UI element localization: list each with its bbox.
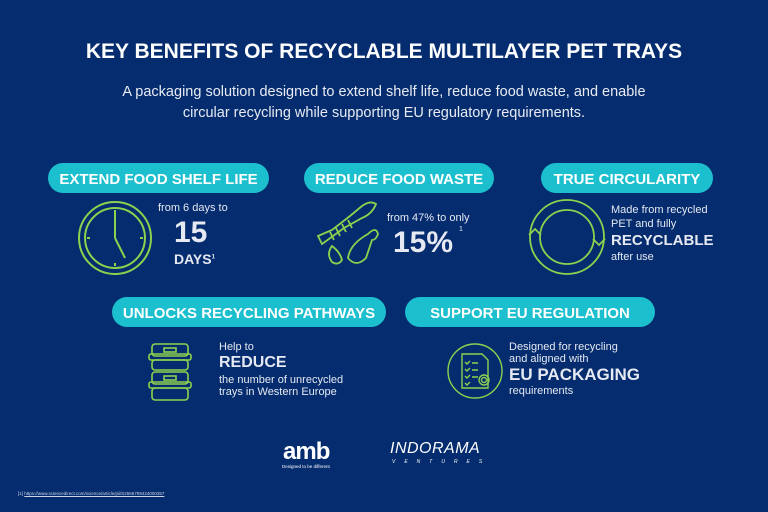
icon: food waste [316,202,379,264]
title: KEY BENEFITS OF RECYCLABLE MULTILAYER PET TRAYS [86,40,682,63]
text: recycling pathways: Help to [219,341,254,353]
pill: extend food shelf life: EXTEND FOOD SHELF LIFE [59,171,258,188]
footnote: [1] https://www.sciencedirect.com/science/article/pii/S2666789424000357 [18,491,164,496]
text: circularity: Made from recycled [611,204,708,216]
text: eu regulation: EU PACKAGING [509,365,640,384]
text: circularity: RECYCLABLE [611,232,714,249]
text: eu regulation [509,341,640,397]
text: food waste: 15% [393,226,453,259]
text: circularity: after use [611,251,654,263]
icon: circular arrows [528,199,606,275]
logo: indorama ventures: VENTURES [392,459,491,465]
text: shelf life: 15 [174,216,207,249]
text: food waste: from 47% to only [387,212,470,224]
pill: reduce food waste [304,163,494,193]
text: circularity [611,204,714,263]
subtitle [122,84,646,121]
icon: clock [78,201,152,275]
text: eu regulation: and aligned with [509,353,589,365]
icon: document certificate [447,343,503,399]
text: recycling pathways: the number of unrecycled [219,374,343,386]
subtitle: A packaging solution designed to extend shelf life, reduce food waste, and enable [122,84,646,100]
pill: true circularity: TRUE CIRCULARITY [554,171,700,188]
text: eu regulation: Designed for recycling [509,341,618,353]
text: eu regulation: requirements [509,385,573,397]
text: shelf life [158,202,228,267]
text: food waste [387,212,470,259]
subtitle: circular recycling while supporting EU regulatory requirements. [183,105,585,121]
text: food waste: 1 [459,226,463,233]
text: circularity: PET and fully [611,218,676,230]
pill: unlocks recycling pathways [112,297,386,327]
text: recycling pathways: REDUCE [219,354,287,371]
text: recycling pathways: trays in Western Europe [219,386,337,398]
logo: indorama ventures: INDORAMA [390,440,480,457]
icon: stacked trays [148,343,192,401]
pill: extend food shelf life [48,163,269,193]
logo: indorama ventures [390,440,491,465]
pill: support eu regulation [405,297,655,327]
logo: amb: Designed to be different [282,464,330,469]
text: shelf life: from 6 days to [158,202,228,214]
text: shelf life: DAYS1 [174,251,215,267]
logo: amb: amb [283,438,329,465]
pill: true circularity [541,163,713,193]
pill: unlocks recycling pathways: UNLOCKS RECYCLING PATHWAYS [123,305,375,322]
pill: support eu regulation: SUPPORT EU REGULATION [430,305,630,322]
text: recycling pathways [219,341,343,398]
pill: reduce food waste: REDUCE FOOD WASTE [315,171,483,188]
